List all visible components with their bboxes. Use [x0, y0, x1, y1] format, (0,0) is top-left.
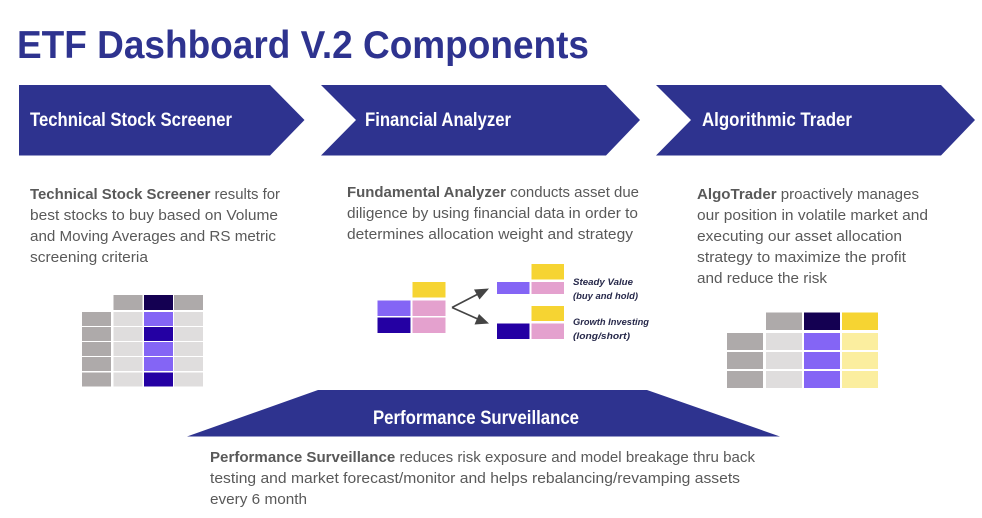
text: AlgoTrader description: and reduce the risk — [697, 270, 828, 287]
text: Technical Stock Screener description — [30, 186, 280, 266]
text: Fundamental Analyzer description: diligence by using financial data in order to — [347, 205, 638, 222]
text: Fundamental Analyzer description: determines allocation weight and strategy — [347, 226, 634, 243]
chevron: Financial Analyzer — [321, 85, 640, 156]
trapezoid: Performance Surveillance: Performance Surveillance — [373, 408, 579, 429]
chevron: Algorithmic Trader — [656, 85, 975, 156]
arrow: to steady value — [452, 288, 489, 308]
arrow: to growth investing — [452, 308, 489, 324]
text: Technical Stock Screener description: Technical Stock Screener results for — [30, 186, 280, 203]
label: growth investing: (long/short) — [573, 331, 630, 342]
text: Performance Surveillance description: testing and market forecast/monitor and helps rebalancing/revamping assets — [210, 470, 740, 487]
block icon: source allocation — [378, 282, 446, 333]
text: Performance Surveillance description: Performance Surveillance reduces risk exposure and model breakage thru back — [210, 449, 755, 466]
text: Technical Stock Screener description: and Moving Averages and RS metric — [30, 228, 277, 245]
trapezoid: Performance Surveillance — [187, 390, 780, 436]
label: steady value: (buy and hold) — [573, 291, 638, 302]
text: Technical Stock Screener description: best stocks to buy based on Volume — [30, 207, 278, 224]
label: steady value: Steady Value — [573, 277, 634, 288]
text: AlgoTrader description: executing our asset allocation — [697, 228, 902, 245]
text: AlgoTrader description — [697, 186, 928, 287]
label: growth investing — [573, 317, 649, 342]
chevron: Algorithmic Trader: Algorithmic Trader — [702, 110, 853, 131]
text: Fundamental Analyzer description: Fundamental Analyzer conducts asset due — [347, 184, 639, 201]
block icon: growth investing — [497, 306, 564, 339]
label: steady value — [573, 277, 638, 302]
text: AlgoTrader description: strategy to maximize the profit — [697, 249, 907, 266]
text: AlgoTrader description: AlgoTrader proactively manages — [697, 186, 919, 203]
text: Technical Stock Screener description: screening criteria — [30, 249, 149, 266]
chevron: Financial Analyzer: Financial Analyzer — [365, 110, 512, 131]
chevron: Technical Stock Screener — [19, 85, 304, 156]
title: ETF Dashboard V.2 Components — [17, 24, 589, 67]
text: Performance Surveillance description — [210, 449, 755, 508]
label: growth investing: Growth Investing — [573, 317, 649, 328]
table icon: algo trader — [727, 312, 878, 388]
text: Performance Surveillance description: every 6 month — [210, 491, 307, 508]
table icon: stock screener — [82, 295, 203, 386]
block icon: steady value — [497, 264, 564, 294]
chevron: Technical Stock Screener: Technical Stock Screener — [30, 110, 233, 131]
text: AlgoTrader description: our position in volatile market and — [697, 207, 928, 224]
text: Fundamental Analyzer description — [347, 184, 639, 243]
